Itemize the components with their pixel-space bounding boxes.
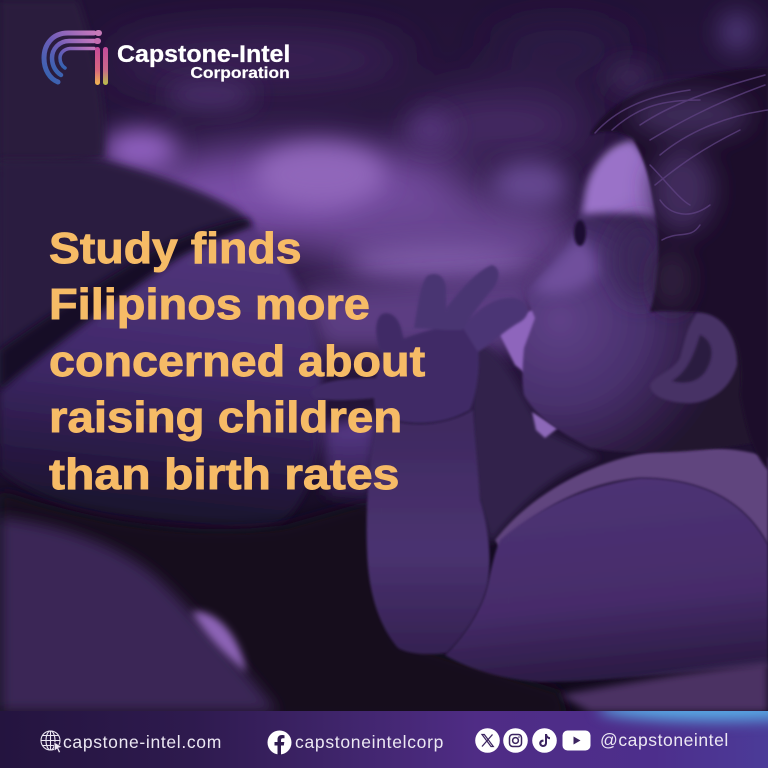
icon: facebook [268,730,292,755]
index finger [445,265,499,330]
brand name [117,41,290,82]
baby dress [495,448,768,548]
headline [49,224,426,499]
baby hand and fingers [311,265,528,423]
lit hair patches [630,93,750,310]
baby hair [590,68,768,470]
dark central shadow [0,490,570,720]
baby cheek shadow [612,218,668,302]
ring finger [376,313,405,352]
pale background in mouth gap [495,305,545,385]
baby ear [650,313,737,403]
little finger [311,378,398,400]
social handle: @capstoneintel [600,730,729,750]
icon: tiktok [532,728,557,753]
headline: Study finds [49,224,301,273]
baby upper arm [445,478,768,682]
icon: x [475,728,500,753]
adult hand highlight [192,612,246,672]
icon: youtube [562,730,590,750]
icon: instagram [503,728,528,753]
baby forearm [367,410,490,654]
brand name: Capstone-Intel [117,41,290,68]
dress bottom [560,662,768,712]
shirt hem shadow [0,218,252,392]
adult upper back [0,0,104,170]
dark baby torso [470,340,600,545]
baby eye [574,220,586,246]
purple haze behind the fingers [300,275,540,350]
headline: than birth rates [49,450,399,499]
headline: Filipinos more [49,280,370,329]
logo [42,30,108,85]
headline: raising children [49,393,402,442]
pale patch under chin [532,412,558,438]
brand name: Corporation [191,65,290,82]
adult shirt [0,160,252,392]
palm [374,325,479,423]
icon: globe with cursor [40,730,62,752]
baby head and face [522,120,768,453]
facebook handle: capstoneintelcorp [295,732,444,752]
website: capstone-intel.com [63,732,222,752]
baby nose and cheek highlight [532,238,600,294]
adult hand lower left [0,517,278,712]
baby forehead highlight [582,140,656,218]
thumb [463,298,528,352]
footer bar [0,711,768,768]
adult thigh [0,228,323,533]
headline: concerned about [49,337,425,386]
bokeh background [130,145,470,245]
lit patch beside forearm [322,415,378,500]
logo mark [42,30,108,85]
middle finger [414,274,447,330]
hair highlights [595,75,768,240]
